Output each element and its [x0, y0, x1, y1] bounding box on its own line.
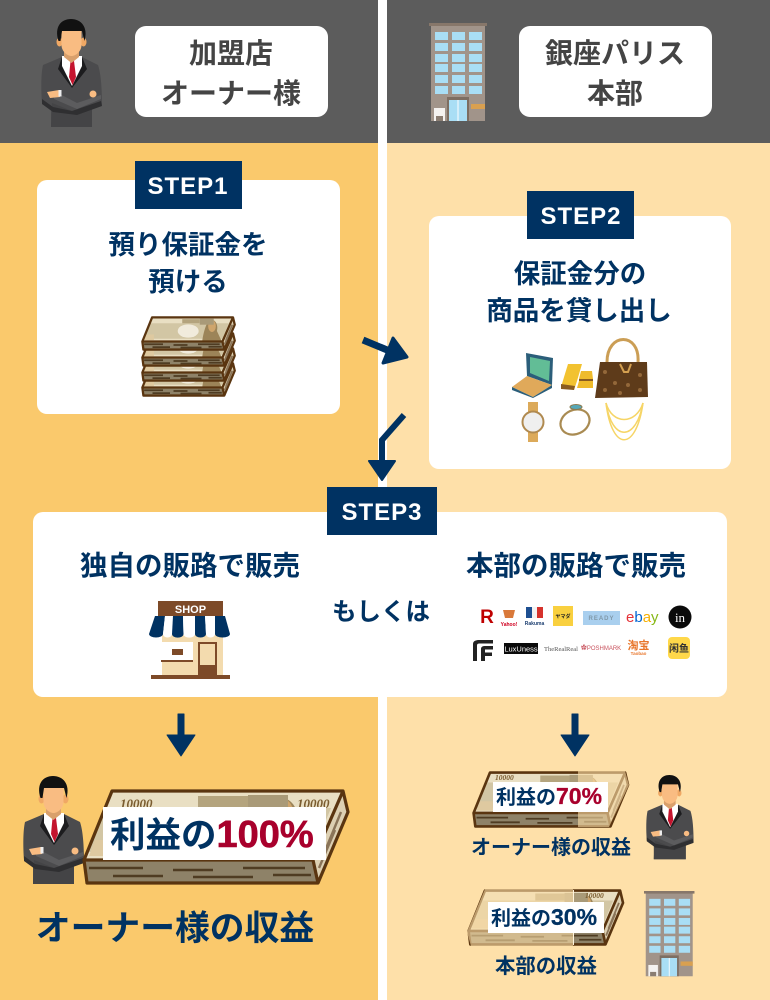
- icon: banknote bundle 30 percent: [467, 889, 623, 946]
- logos: sales channels: [473, 606, 692, 661]
- icon: banknote bundle 70 percent: 10000: [495, 773, 514, 782]
- logo: in circle: [668, 606, 692, 628]
- icon: ring: [556, 404, 594, 439]
- panel: step 1: [37, 161, 340, 414]
- arrow: down right: [561, 714, 589, 756]
- logo: Rakuma: Rakuma: [525, 621, 544, 627]
- logo: Yahoo shopping: Yahoo!: [501, 622, 518, 628]
- arrow: step 1 to step 2: [363, 338, 407, 363]
- step 1 badge: STEP1: [147, 173, 229, 200]
- icon: franchise owner: [41, 19, 102, 127]
- logo: Xianyu: 闲鱼: [669, 642, 689, 655]
- logo: Xianyu: [668, 637, 690, 659]
- logo: yellow marketplace: ヤマダ: [555, 613, 571, 620]
- icon: building small: [644, 891, 694, 976]
- step 1 badge: [135, 161, 242, 209]
- logo: Taobao: 淘宝: [628, 638, 650, 652]
- logo: in circle: in: [675, 610, 686, 625]
- step 1 text: 預り保証金を: [108, 230, 268, 260]
- arrow: step 2 to step 3: [369, 415, 404, 480]
- step 2 text: [486, 259, 672, 326]
- right column background: [387, 143, 770, 1000]
- icon: stacked banknotes: [142, 317, 235, 396]
- text: owner revenue: オーナー様の収益: [36, 909, 314, 948]
- step 1 text: [108, 230, 268, 297]
- logo: Ready: [583, 611, 620, 625]
- icon: large banknote bundle: 10000: [120, 796, 153, 811]
- heading: Ginza Paris headquarters: 本部: [587, 78, 643, 109]
- step 2 badge: [527, 191, 634, 239]
- left column background: [0, 143, 378, 1000]
- panel: headquarters 30 percent profit: [467, 889, 694, 978]
- heading: franchise owner: [135, 26, 328, 117]
- right header band: [387, 0, 770, 143]
- step 3 badge: STEP3: [341, 499, 423, 526]
- panel: owner 70 percent profit: [471, 771, 694, 859]
- logo: yellow marketplace: [553, 606, 573, 626]
- logo: Yahoo shopping: [501, 610, 518, 628]
- label: profit 70 percent: 利益の70%: [496, 783, 602, 809]
- logo: Rakuten: R: [480, 607, 494, 628]
- panel: step 2: [429, 191, 731, 469]
- or text: もしくは: [332, 599, 430, 626]
- icon: headquarters building: [429, 23, 487, 121]
- headquarters channel text: 本部の販路で販売: [466, 550, 686, 581]
- icon: necklace: [606, 403, 643, 440]
- panel: owner 100 percent profit: [23, 776, 348, 948]
- logo: Farfetch: [473, 640, 493, 661]
- step 2 text: 商品を貸し出し: [486, 296, 672, 326]
- icon: large banknote bundle: [84, 791, 348, 883]
- icon: shop: [149, 601, 230, 679]
- step 2 badge: STEP2: [540, 203, 622, 230]
- icon: shop: SHOP: [175, 604, 206, 616]
- icon: banknote bundle 70 percent: [474, 771, 629, 827]
- logo: Taobao: Taobao: [631, 651, 647, 656]
- icon: banknote bundle 30 percent: 10000: [585, 891, 604, 900]
- icon: large banknote bundle: 10000: [297, 796, 330, 811]
- logo: eBay: ebay: [626, 609, 659, 626]
- heading: franchise owner: オーナー様: [161, 78, 301, 109]
- panel: step 3: [33, 487, 727, 697]
- text: owner revenue small: オーナー様の収益: [471, 836, 631, 859]
- icon: jewellery box: [512, 353, 553, 398]
- icon: wristwatch: [522, 402, 544, 442]
- icon: handbag: [595, 340, 648, 398]
- text: headquarters revenue: 本部の収益: [495, 955, 597, 978]
- heading: Ginza Paris headquarters: 銀座パリス: [545, 38, 685, 69]
- label: profit 100 percent: 利益の100%: [110, 814, 314, 856]
- icon: owner small: [646, 775, 694, 859]
- logo: Taobao: [628, 638, 650, 656]
- logo: Ready: READY: [588, 616, 615, 622]
- left header band: [0, 0, 378, 143]
- logo: LuxUness: LuxUness: [504, 644, 538, 654]
- step 2 text: 保証金分の: [514, 259, 646, 289]
- step 3 badge: [327, 487, 437, 535]
- logo: Rakuma: [525, 607, 544, 627]
- heading: franchise owner: 加盟店: [189, 38, 273, 69]
- arrow: down left: [167, 714, 195, 756]
- label: profit 30 percent: 利益の30%: [491, 904, 597, 930]
- heading: Ginza Paris headquarters: [519, 26, 712, 117]
- own channel text: 独自の販路で販売: [80, 550, 300, 581]
- icon: owner: [23, 776, 84, 884]
- icon: gold bars: [561, 364, 593, 390]
- step 1 text: 預ける: [148, 267, 228, 297]
- logo: Poshmark: ✿POSHMARK: [581, 645, 621, 652]
- logo: The RealReal: TheRealReal: [544, 646, 578, 653]
